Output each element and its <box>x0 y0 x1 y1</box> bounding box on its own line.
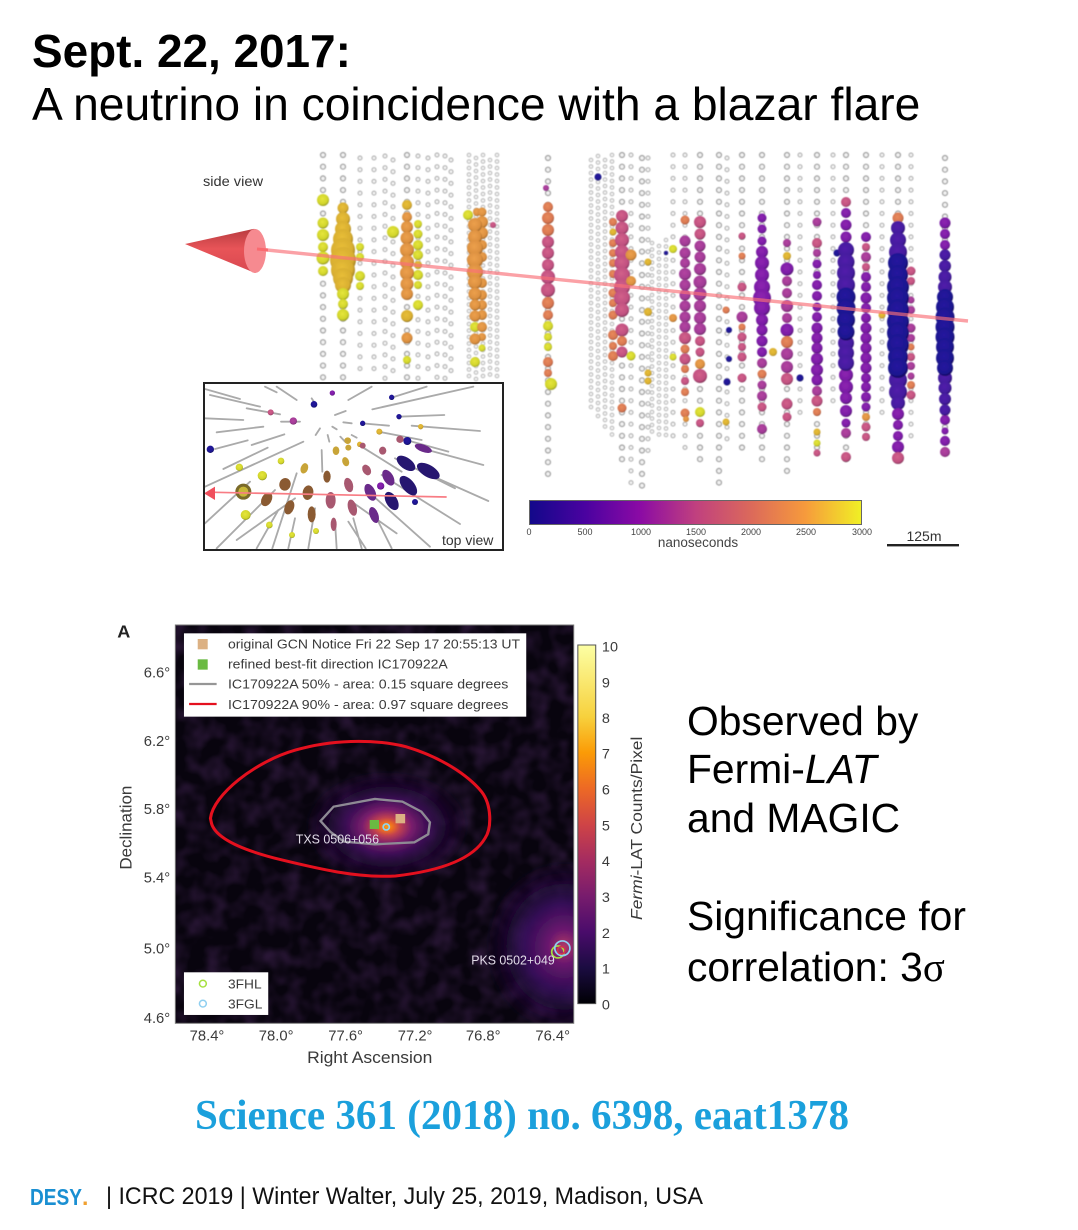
colour bar: nanoseconds: 2500 <box>796 527 816 537</box>
panel: Fermi-LAT counts map <box>117 621 646 1067</box>
radial strings <box>205 387 488 548</box>
y axis title: Declination <box>117 786 135 870</box>
y axis ticks: 5.0° <box>144 941 170 957</box>
source PKS: PKS 0502+049 <box>471 952 555 967</box>
legend <box>184 633 526 717</box>
counts colour bar <box>578 640 646 1014</box>
colour bar: nanoseconds: 1500 <box>686 527 706 537</box>
text block: observed by <box>687 698 966 990</box>
sphere hits <box>207 395 418 505</box>
counts colour bar: 6 <box>602 783 610 799</box>
y axis ticks: 6.6° <box>144 666 170 681</box>
neutrino track line <box>257 249 968 321</box>
50% contour <box>321 799 430 844</box>
x axis ticks: 77.2° <box>398 1028 432 1044</box>
counts colour bar: Fermi-LAT Counts/Pixel <box>629 737 646 920</box>
markers <box>370 814 405 830</box>
catalog legend: 3FGL <box>228 996 263 1011</box>
90% contour <box>210 741 490 876</box>
legend: IC170922A 50% - area: 0.15 square degrees <box>228 677 509 692</box>
top view label: top view <box>442 532 494 548</box>
source label TXS: TXS 0506+056 <box>296 832 379 847</box>
x axis ticks <box>190 1028 570 1044</box>
colour bar: nanoseconds: 500 <box>577 527 593 537</box>
hit spheres <box>316 174 954 464</box>
colour bar: nanoseconds: 0 <box>526 527 532 537</box>
inset: top view <box>204 383 503 550</box>
footer: | ICRC 2019 | Winter Walter, July 25, 2019, Madison, USA <box>106 1183 703 1210</box>
footer: . <box>82 1184 88 1210</box>
scale bar: 125m <box>887 528 959 546</box>
text block: observed by: and MAGIC <box>687 795 900 841</box>
y axis ticks: 5.4° <box>144 871 170 887</box>
source PKS <box>471 941 570 967</box>
counts colour bar: 0 <box>602 998 610 1014</box>
y axis ticks <box>144 666 170 1027</box>
colour bar: nanoseconds: 3000 <box>852 527 872 537</box>
y axis ticks: 5.8° <box>144 802 170 818</box>
text block: observed by: Significance for <box>687 893 966 939</box>
scale bar: 125m: 125m <box>906 528 942 544</box>
catalog legend: 3FHL <box>228 976 262 991</box>
text block: observed by: correlation: 3σ <box>687 944 945 990</box>
title: Sept. 22, 2017: <box>32 25 351 77</box>
counts colour bar: 3 <box>602 890 610 906</box>
arrow cone <box>185 229 268 273</box>
text block: observed by: Observed by <box>687 698 919 744</box>
counts colour bar: 10 <box>602 640 618 656</box>
footer: DESY <box>30 1184 82 1210</box>
track arrow <box>204 487 447 500</box>
inset frame <box>204 383 503 550</box>
y axis ticks: 4.6° <box>144 1011 170 1027</box>
citation: Science 361 (2018) no. 6398, eaat1378 <box>195 1093 849 1139</box>
legend: IC170922A 90% - area: 0.97 square degrees <box>228 697 509 712</box>
sensor strings <box>323 155 945 494</box>
counts colour bar: 9 <box>602 676 610 691</box>
x axis ticks: 76.8° <box>466 1028 501 1044</box>
title <box>32 25 920 130</box>
counts colour bar: 1 <box>602 962 610 978</box>
counts colour bar: 4 <box>602 854 610 870</box>
text block: observed by: Fermi-LAT <box>687 746 880 792</box>
x axis ticks: 78.4° <box>190 1028 224 1044</box>
panel: IceCube event display side view <box>185 155 968 494</box>
counts colour bar: 5 <box>602 819 610 834</box>
panel letter: A <box>117 621 130 642</box>
counts colour bar: 7 <box>602 747 610 763</box>
y axis ticks: 6.2° <box>144 734 170 750</box>
x axis ticks: 77.6° <box>328 1028 363 1044</box>
counts colour bar: 8 <box>602 711 610 727</box>
colour bar: nanoseconds: nanoseconds <box>658 535 738 550</box>
legend: refined best-fit direction IC170922A <box>228 657 448 671</box>
colour bar: nanoseconds: 1000 <box>631 527 651 537</box>
legend: original GCN Notice Fri 22 Sep 17 20:55:13 UT <box>228 637 520 651</box>
colour bar: nanoseconds: 2000 <box>741 527 761 537</box>
colour bar: nanoseconds <box>526 500 872 550</box>
catalog legend <box>184 972 268 1015</box>
title: A neutrino in coincidence with a blazar flare <box>32 78 920 130</box>
x axis ticks: 78.0° <box>259 1028 293 1044</box>
side view label: side view <box>203 173 264 189</box>
heat map <box>176 626 574 1023</box>
x axis ticks: 76.4° <box>535 1028 570 1044</box>
x axis title: Right Ascension <box>307 1048 432 1067</box>
counts colour bar: 2 <box>602 926 610 942</box>
